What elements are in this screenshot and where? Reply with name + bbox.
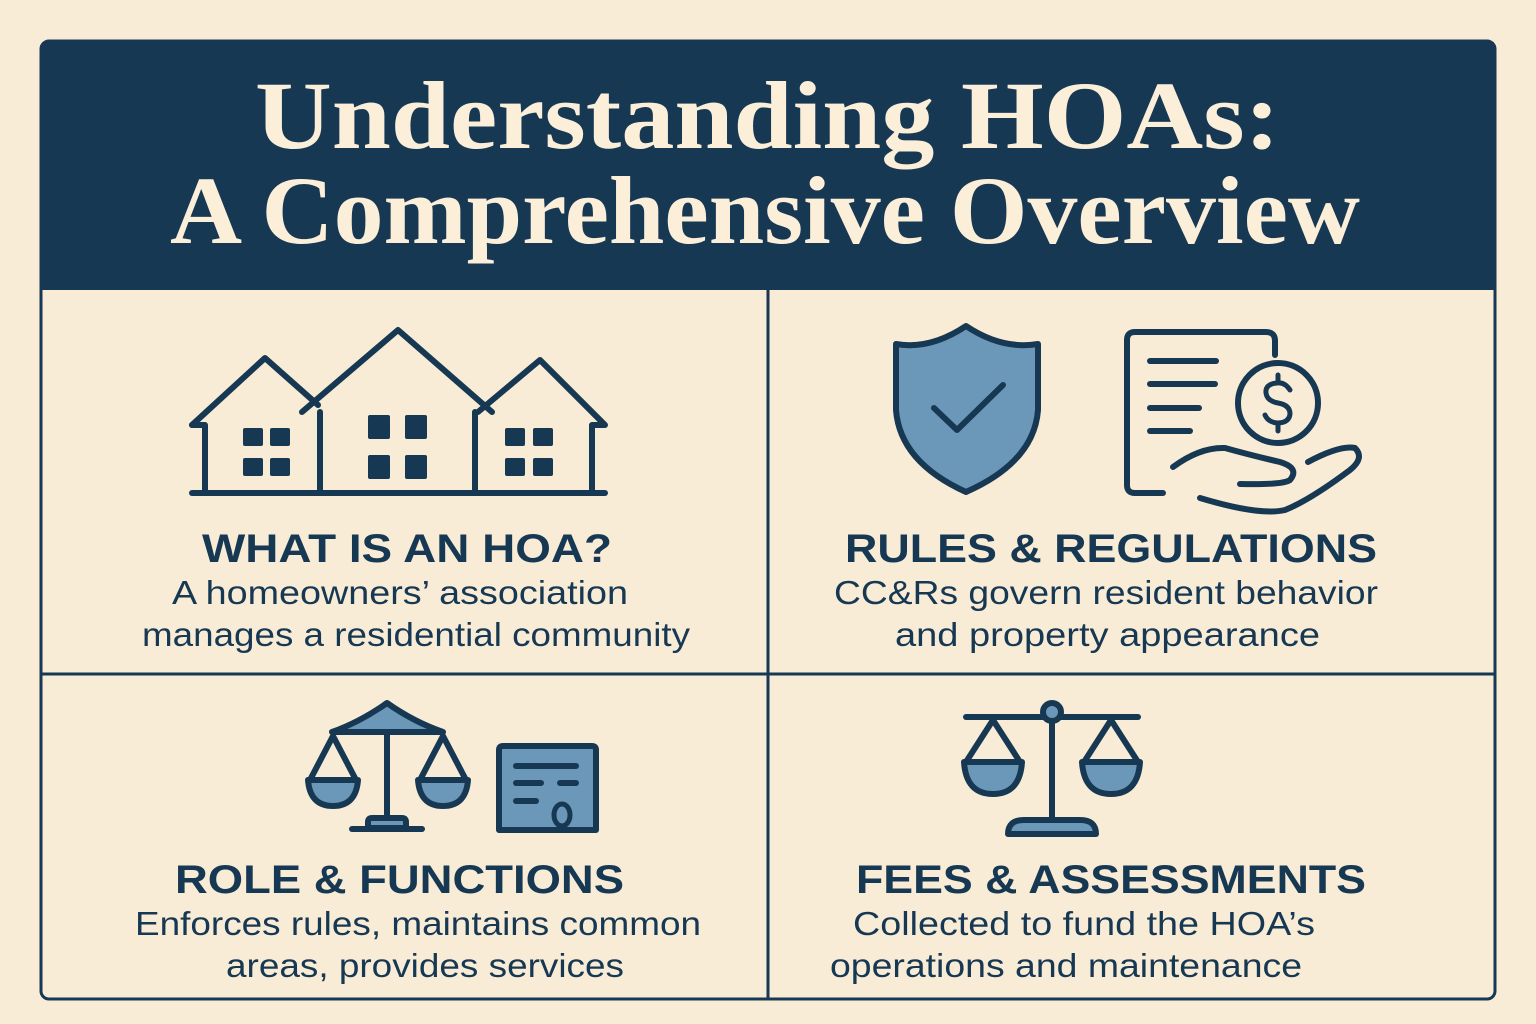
text: role & functions [135,905,701,984]
text: what is an HOA: manages a residential community [142,616,691,653]
text: rules & regulations: and property appearance [895,616,1320,653]
panel: rules & regulations [834,326,1378,653]
icon: houses [192,330,605,493]
text: role & functions: areas, provides services [226,947,624,984]
text: rules & regulations: CC&Rs govern resident behavior [834,574,1378,611]
text: rules & regulations [834,574,1378,653]
heading: rules & regulations: RULES & REGULATIONS [845,527,1377,571]
icon: scales [308,703,468,829]
heading: role & functions: ROLE & FUNCTIONS [175,858,624,902]
panel: fees & assessments [830,703,1366,984]
heading: what is an HOA: WHAT IS AN HOA? [202,527,612,571]
text: what is an HOA [142,574,691,653]
title: Understanding HOAs: [255,62,1280,169]
icon: document card [499,746,596,830]
panel: what is an HOA [142,330,691,653]
text: fees & assessments: operations and maintenance [830,947,1302,984]
panel: role & functions [135,703,701,984]
text: fees & assessments [830,905,1315,984]
title [170,62,1360,264]
icon: balance scale [964,703,1140,834]
text: what is an HOA: A homeowners’ association [172,574,628,611]
icon: document with coin and hand [1127,332,1359,512]
text: role & functions: Enforces rules, maintains common [135,905,701,942]
icon: shield [896,326,1038,492]
title: A Comprehensive Overview [170,157,1360,264]
text: fees & assessments: Collected to fund the HOA’s [853,905,1315,942]
heading: fees & assessments: FEES & ASSESSMENTS [856,858,1366,902]
